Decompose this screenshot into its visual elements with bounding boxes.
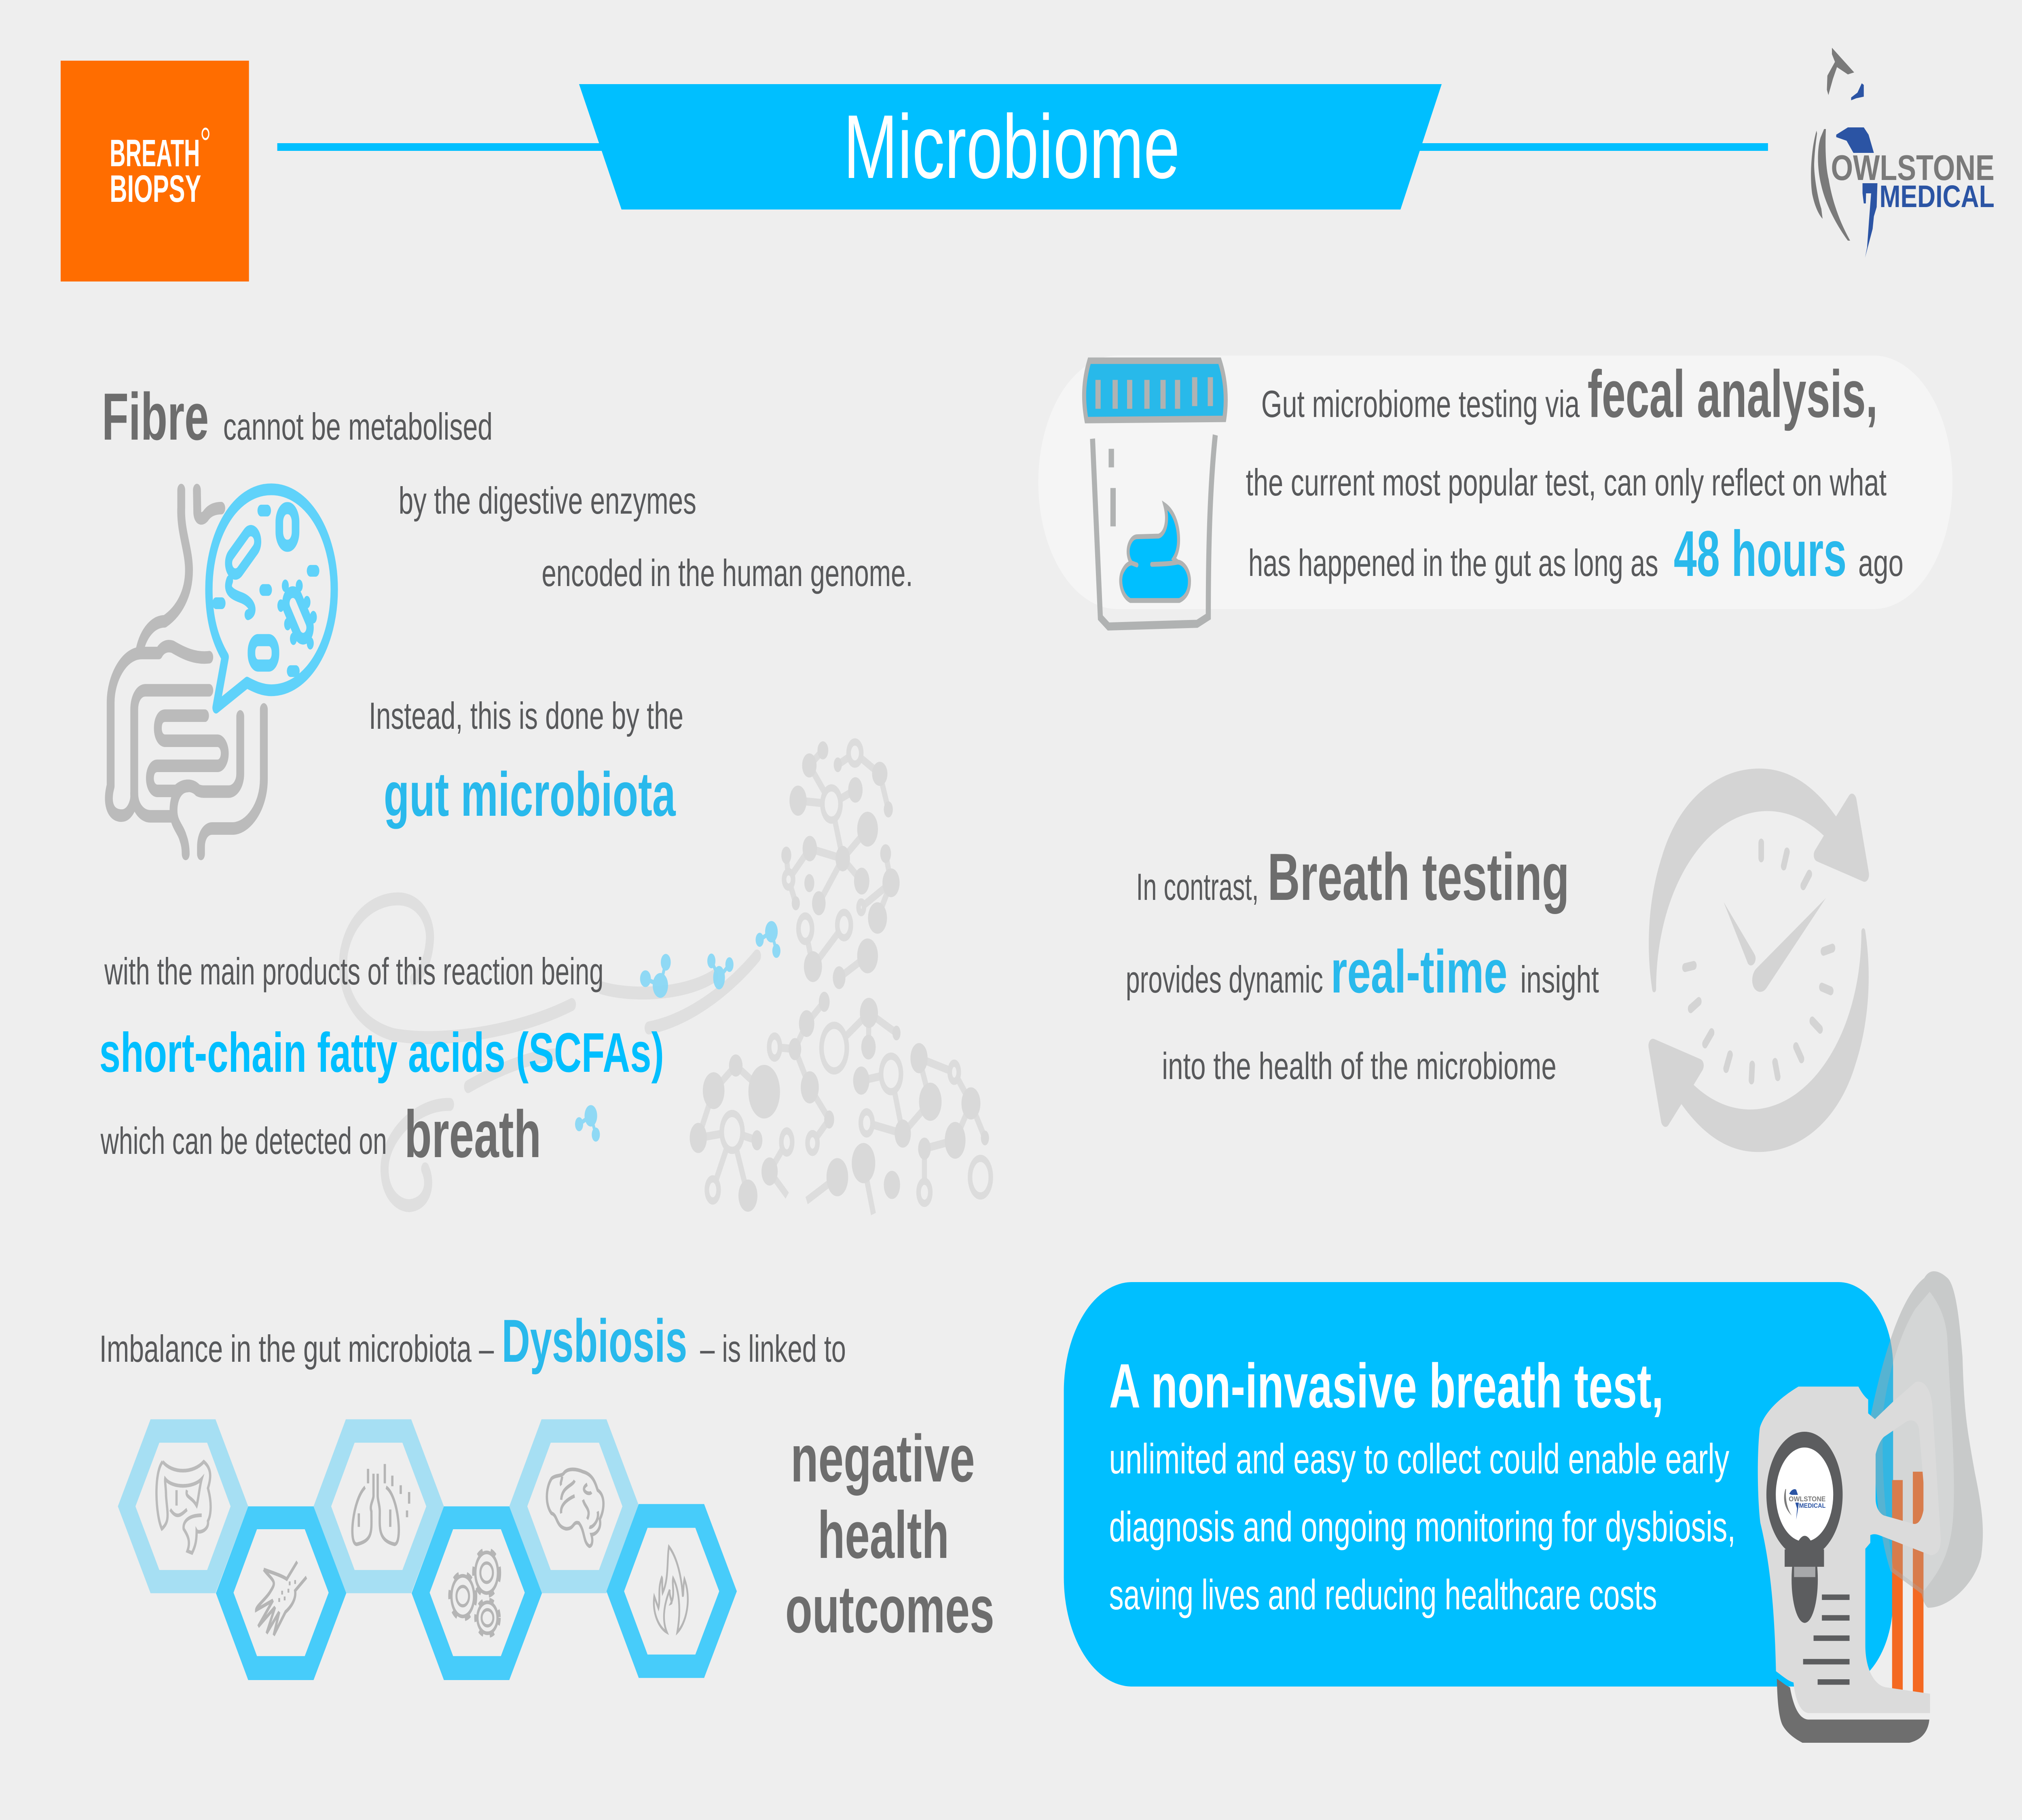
vent lines bbox=[1803, 1594, 1850, 1685]
text: gut microbiome testing: Gut microbiome testing via bbox=[1261, 383, 1580, 425]
hexagons: light bbox=[118, 1419, 639, 1593]
text: imbalance: Imbalance in the gut microbiota – bbox=[99, 1327, 494, 1370]
text: negative health outcomes: health bbox=[818, 1498, 949, 1572]
text: linked to: – is linked to bbox=[700, 1327, 846, 1370]
text: negative health outcomes: outcomes bbox=[785, 1572, 994, 1646]
highlight: real-time: real-time bbox=[1331, 938, 1508, 1005]
dial: MEDICAL bbox=[1799, 1502, 1825, 1509]
icon: gears bbox=[450, 1550, 499, 1636]
callout heading: A non-invasive breath test, bbox=[1109, 1351, 1664, 1421]
sample tubes bbox=[1892, 1472, 1923, 1694]
text line 4: Instead, this is done by the bbox=[369, 694, 683, 737]
base bbox=[1777, 1678, 1929, 1743]
mouthpiece detail bbox=[1785, 1536, 1824, 1623]
text: in contrast: In contrast, bbox=[1136, 866, 1258, 908]
title banner bbox=[277, 84, 1768, 210]
panel: dysbiosis text bbox=[99, 1307, 846, 1375]
panel: fibre text bbox=[102, 379, 913, 737]
title: Microbiome bbox=[844, 96, 1180, 197]
icon: brain bbox=[547, 1469, 603, 1546]
highlight: Breath testing: Breath testing bbox=[1267, 840, 1569, 914]
text: ago: ago bbox=[1858, 542, 1904, 584]
dial bbox=[1766, 1432, 1842, 1558]
graphic: breath swirl bbox=[343, 899, 757, 1206]
logo: Breath Biopsy: BREATH bbox=[110, 132, 200, 175]
mask bbox=[1871, 1271, 1983, 1608]
panel: gut microbiota text bbox=[99, 760, 676, 1171]
highlight: SCFAs: short-chain fatty acids (SCFAs) bbox=[99, 1022, 664, 1084]
highlight: fecal analysis: fecal analysis, bbox=[1588, 357, 1878, 431]
icon: lungs bbox=[352, 1464, 409, 1544]
text line 1: cannot be metabolised bbox=[223, 405, 493, 448]
icon: specimen cup bbox=[1084, 361, 1226, 626]
highlight: 48 hours: 48 hours bbox=[1674, 517, 1846, 590]
logo: Owlstone Medical: OWLSTONE bbox=[1831, 148, 1995, 188]
logo: Owlstone Medical: MEDICAL bbox=[1880, 179, 1995, 214]
icon: blue breath molecules bbox=[575, 921, 780, 1142]
panel: breath testing text bbox=[1126, 840, 1599, 1087]
graphic: molecules bbox=[690, 741, 991, 1214]
logo: Breath Biopsy bbox=[61, 61, 249, 281]
text: detected on: which can be detected on bbox=[100, 1120, 387, 1162]
panel: non-invasive breath test callout bbox=[1064, 1282, 1893, 1687]
logo: Breath Biopsy: BIOPSY bbox=[110, 167, 201, 210]
text line 2: by the digestive enzymes bbox=[399, 479, 696, 522]
highlight: Dysbiosis: Dysbiosis bbox=[502, 1307, 687, 1375]
icon: hand bbox=[256, 1562, 307, 1635]
dial: OWLSTONE bbox=[1789, 1495, 1825, 1503]
text: happened in the gut: has happened in the gut as long as bbox=[1248, 542, 1658, 584]
text: main products: with the main products of this reaction being bbox=[104, 950, 604, 993]
icon: clock with circular arrows bbox=[1648, 768, 1869, 1152]
text: negative health outcomes bbox=[785, 1421, 994, 1646]
highlight: breath: breath bbox=[404, 1097, 541, 1171]
device body bbox=[1758, 1382, 1941, 1713]
callout line 3: saving lives and reducing healthcare costs bbox=[1109, 1571, 1657, 1619]
icon: gut with bacteria speech bubble bbox=[109, 489, 334, 854]
logo: Owlstone Medical bbox=[1811, 48, 1995, 258]
panel: fecal analysis pill bbox=[1038, 356, 1952, 626]
highlight: gut microbiota: gut microbiota bbox=[384, 760, 676, 829]
icon: intestine bbox=[157, 1462, 211, 1553]
text: insight: insight bbox=[1520, 958, 1599, 1001]
text: health of the microbiome: into the health of the microbiome bbox=[1162, 1045, 1557, 1087]
heading: Fibre: Fibre bbox=[102, 379, 209, 454]
hexagons: strong bbox=[216, 1504, 737, 1680]
text line 3: encoded in the human genome. bbox=[541, 552, 913, 594]
icon: flame bbox=[654, 1547, 688, 1632]
callout line 1: unlimited and easy to collect could enable early bbox=[1109, 1435, 1730, 1483]
text: current test: the current most popular test, can only reflect on what bbox=[1246, 461, 1887, 504]
callout line 2: diagnosis and ongoing monitoring for dysbiosis, bbox=[1109, 1503, 1736, 1551]
text: provides dynamic: provides dynamic bbox=[1126, 958, 1323, 1001]
text: negative health outcomes: negative bbox=[791, 1421, 975, 1496]
hexagon chain of health outcome icons bbox=[118, 1419, 737, 1680]
icon: breath collection device bbox=[1758, 1271, 1983, 1743]
